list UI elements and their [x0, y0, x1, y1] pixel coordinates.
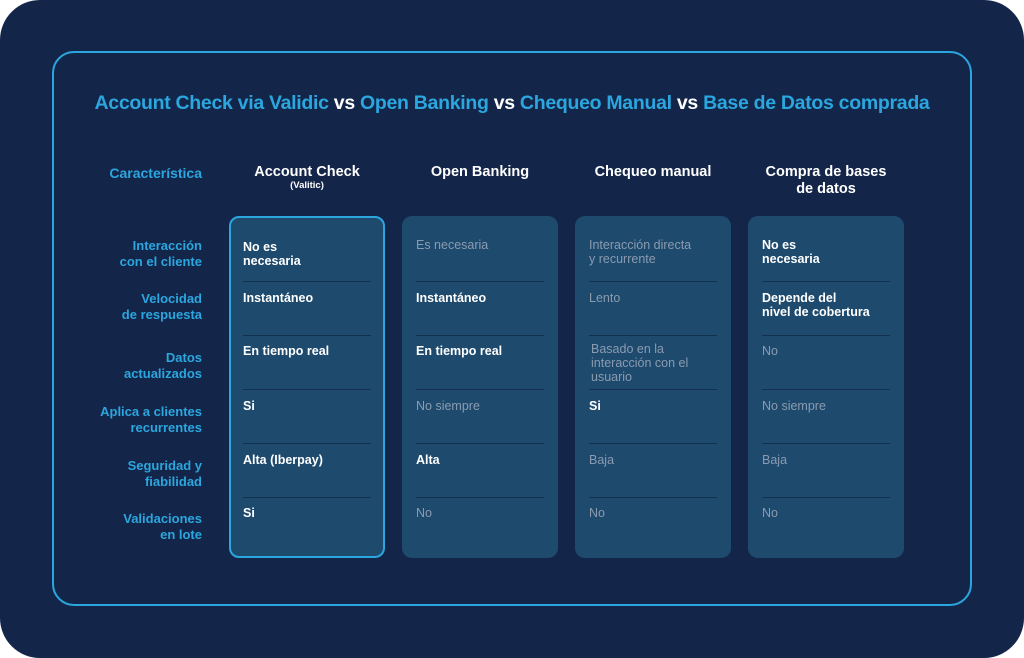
row labels: actualizados	[124, 366, 202, 381]
card: chequeo manual: Baja	[589, 453, 614, 467]
row labels: Validaciones	[123, 511, 202, 526]
row labels: recurrentes	[130, 420, 202, 435]
card: bases de datos: nivel de cobertura	[762, 305, 870, 319]
column headings: Open Banking	[431, 164, 529, 180]
card: account check: En tiempo real	[243, 344, 329, 358]
card: chequeo manual: Interacción directa	[589, 238, 691, 252]
card: account check: No es	[243, 240, 277, 254]
row labels: Seguridad y	[128, 458, 202, 473]
column headings: Account Check	[254, 164, 360, 180]
column headings	[254, 164, 886, 197]
card: chequeo manual: interacción con el	[591, 356, 688, 370]
card: account check: Si	[243, 506, 255, 520]
card: account check: necesaria	[243, 254, 301, 268]
column headings: Chequeo manual	[595, 164, 711, 180]
card: open banking: Es necesaria	[416, 238, 488, 252]
card: bases de datos: Depende del	[762, 291, 836, 305]
card: account check: Si	[243, 399, 255, 413]
inner frame	[52, 51, 972, 606]
row labels: con el cliente	[120, 254, 202, 269]
card: chequeo manual	[575, 216, 731, 558]
row labels	[100, 165, 202, 542]
card: open banking: Alta	[416, 453, 440, 467]
card: chequeo manual: Basado en la	[591, 342, 664, 356]
column headings: de datos	[796, 181, 856, 197]
card: chequeo manual: No	[589, 506, 605, 520]
row labels: Interacción	[133, 238, 202, 253]
card: open banking: No	[416, 506, 432, 520]
card: account check: Instantáneo	[243, 291, 313, 305]
card: open banking: No siempre	[416, 399, 480, 413]
card: bases de datos	[748, 216, 904, 558]
card: chequeo manual: usuario	[591, 370, 632, 384]
row labels: Velocidad	[141, 291, 202, 306]
row labels: Característica	[109, 165, 202, 181]
row labels: fiabilidad	[145, 474, 202, 489]
row labels: Datos	[166, 350, 202, 365]
card: bases de datos: necesaria	[762, 252, 820, 266]
card: bases de datos: Baja	[762, 453, 787, 467]
column headings: Compra de bases	[766, 164, 886, 180]
card: chequeo manual: Lento	[589, 291, 620, 305]
row labels: de respuesta	[122, 307, 202, 322]
card: bases de datos: No	[762, 506, 778, 520]
card: open banking: En tiempo real	[416, 344, 502, 358]
card: bases de datos: No es	[762, 238, 796, 252]
card: account check: Alta (Iberpay)	[243, 453, 323, 467]
card: bases de datos: No siempre	[762, 399, 826, 413]
column headings: (Valitic)	[290, 180, 324, 191]
row labels: Aplica a clientes	[100, 404, 202, 419]
card: open banking: Instantáneo	[416, 291, 486, 305]
card: account check	[229, 216, 385, 558]
title: Account Check via Validic vs Open Banking vs Chequeo Manual vs Base de Datos comprada	[94, 92, 929, 114]
row labels: en lote	[160, 527, 202, 542]
card: open banking	[402, 216, 558, 558]
card: chequeo manual: Si	[589, 399, 601, 413]
card: chequeo manual: y recurrente	[589, 252, 656, 266]
card: bases de datos: No	[762, 344, 778, 358]
